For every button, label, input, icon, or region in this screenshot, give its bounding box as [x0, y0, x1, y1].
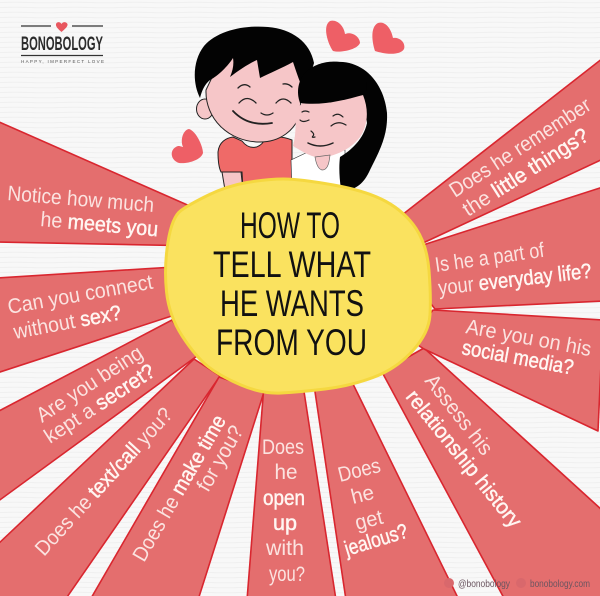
boy ear	[196, 99, 214, 119]
text: does he open up with you: he	[274, 461, 298, 484]
text: notice how much he meets you: Notice how much	[7, 182, 155, 217]
ray: does he open up with you	[247, 385, 336, 596]
girl face	[293, 95, 367, 158]
title: HOW TO	[240, 205, 340, 246]
text: does he make time for you: for you?	[192, 422, 248, 496]
title: HE WANTS	[220, 283, 364, 324]
text: does he get jealous	[336, 454, 411, 561]
girl hair front	[298, 62, 367, 104]
ray: are you on his social media	[410, 310, 600, 431]
boy head	[206, 50, 303, 142]
boy arm	[222, 172, 243, 190]
text: are you on his social media	[460, 315, 593, 380]
logo	[21, 22, 104, 64]
text: does he make time for you: Does he make time	[128, 411, 231, 566]
boy hair	[195, 27, 314, 98]
text: is he a part of your everyday life	[433, 239, 593, 300]
text: does he open up with you: with	[265, 537, 304, 560]
text: notice how much he meets you	[7, 182, 159, 241]
text: are you on his social media: social media?	[460, 336, 575, 380]
ray: notice how much he meets you	[0, 121, 200, 246]
text: does he open up with you: Does	[262, 436, 304, 459]
title	[213, 205, 371, 363]
text: does he open up with you: you?	[269, 563, 305, 586]
text: assess his relationship history: relationship history	[401, 386, 526, 533]
logo tagline: HAPPY, IMPERFECT LOVE	[21, 59, 104, 64]
footer handles	[444, 578, 590, 590]
text: can you connect without sex	[6, 271, 155, 344]
text: is he a part of your everyday life: Is he a part of	[433, 239, 546, 277]
text: does he open up with you	[262, 436, 305, 586]
text: does he open up with you: open	[263, 487, 305, 510]
logo wordmark: BONOBOLOGY	[21, 34, 103, 55]
title: FROM YOU	[216, 322, 367, 363]
text: does he get jealous: Does	[336, 454, 383, 487]
boy shirt	[218, 137, 292, 190]
text: can you connect without sex: without sex?	[11, 301, 123, 344]
illustration: couple	[195, 27, 387, 192]
text: are you on his social media: Are you on his	[464, 315, 593, 361]
icon: social	[444, 578, 454, 588]
ray: can you connect without sex	[0, 266, 190, 373]
ray: does he get jealous	[314, 384, 459, 596]
text: can you connect without sex: Can you connect	[6, 271, 155, 319]
ray: are you being kept a secret	[0, 320, 197, 502]
central yellow blob	[166, 179, 430, 393]
text: are you being kept a secret: Are you being	[32, 341, 147, 427]
text: does he get jealous: jealous?	[341, 520, 411, 561]
text: does he text or call you: Does he text/call you?	[31, 403, 177, 560]
ray: does he make time for you	[90, 377, 264, 596]
heart top right	[372, 23, 404, 54]
text: does he get jealous: he	[349, 481, 377, 509]
boy face	[233, 84, 292, 124]
girl shirt	[291, 150, 345, 192]
girl hair back	[300, 62, 387, 190]
logo rule and heart	[21, 26, 103, 56]
text: notice how much he meets you: he meets you	[40, 208, 159, 241]
ray: does he text or call you	[0, 359, 220, 596]
girl expression	[300, 111, 346, 146]
text: assess his relationship history: Assess his	[420, 370, 497, 460]
girl neck	[315, 155, 330, 170]
footer handles: @bonobology	[458, 578, 511, 590]
text: are you being kept a secret: kept a secret?	[40, 360, 159, 448]
heart left	[172, 129, 203, 163]
title: TELL WHAT	[213, 244, 371, 285]
ray: is he a part of your everyday life	[420, 187, 600, 309]
icon: web	[516, 578, 526, 588]
ray: does he remember the little things	[402, 58, 600, 243]
ray: assess his relationship history	[382, 348, 600, 596]
text: does he open up with you: up	[273, 512, 297, 535]
heart top middle	[326, 21, 360, 52]
text: does he remember the little things: the little things?	[458, 124, 593, 221]
text: does he get jealous: get	[353, 506, 386, 535]
